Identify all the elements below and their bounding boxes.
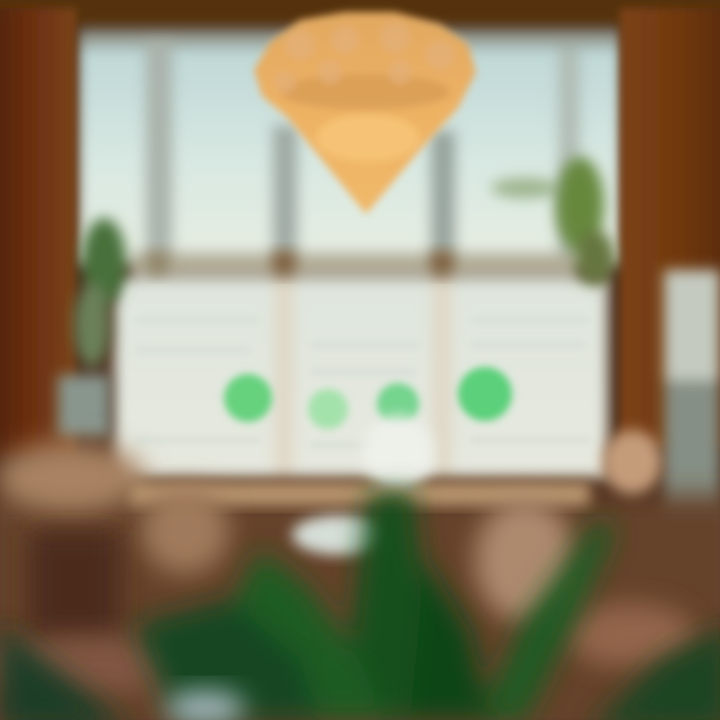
window: top frame: [78, 30, 622, 48]
top valance: [0, 0, 720, 26]
furniture: floor left: [0, 637, 210, 693]
window: mullion 4: [558, 50, 580, 265]
green circle 2: [308, 389, 348, 429]
leaf: far left: [135, 600, 320, 720]
rail knots: [146, 250, 455, 276]
bottom pale reflection: [165, 690, 245, 720]
right plant: [491, 157, 615, 286]
left plant: [58, 218, 126, 437]
leaf: bottom right: [590, 625, 720, 720]
window: horizontal rail: [130, 252, 580, 276]
furniture: table top: [130, 482, 590, 506]
window: [78, 30, 622, 478]
window: sky panes: [78, 38, 622, 264]
foreground plant: [0, 490, 720, 720]
furniture: dark base: [0, 495, 720, 720]
window: mullion 3: [430, 130, 456, 265]
furniture: left sofa: [0, 442, 145, 514]
furniture: left dark block: [30, 530, 120, 640]
furniture: floor right: [565, 603, 695, 667]
right curtain: [620, 8, 720, 448]
furniture: white plate: [292, 515, 388, 555]
chandelier: [254, 12, 476, 214]
chandelier: beads: [274, 23, 455, 93]
window: lower mullion 2: [274, 278, 294, 478]
right column: [664, 270, 720, 610]
chandelier: darker band: [280, 74, 450, 110]
leaf: bottom left dark: [0, 625, 130, 720]
leaf: centre: [345, 490, 450, 720]
furniture: right arm: [602, 430, 662, 494]
furniture: right chair: [475, 498, 575, 622]
lower furniture: [0, 430, 720, 720]
green circle 3: [377, 383, 419, 425]
window: mullion 1: [145, 40, 173, 265]
furniture: left chair: [141, 486, 229, 574]
window: lower mullion 3: [432, 278, 452, 478]
pale lines on lower window: [135, 320, 590, 445]
window: lower panel: [114, 278, 608, 478]
green circle 4: [458, 367, 512, 421]
white flower: [362, 416, 434, 488]
chandelier: body: [254, 12, 476, 214]
window: mullion 2: [272, 125, 298, 265]
leaf: centre-right: [410, 560, 490, 720]
chandelier: highlight lower: [316, 114, 420, 162]
green circle 1: [224, 374, 272, 422]
left curtain: [0, 8, 76, 458]
leaf: left: [215, 550, 385, 720]
leaf: right: [480, 520, 615, 720]
